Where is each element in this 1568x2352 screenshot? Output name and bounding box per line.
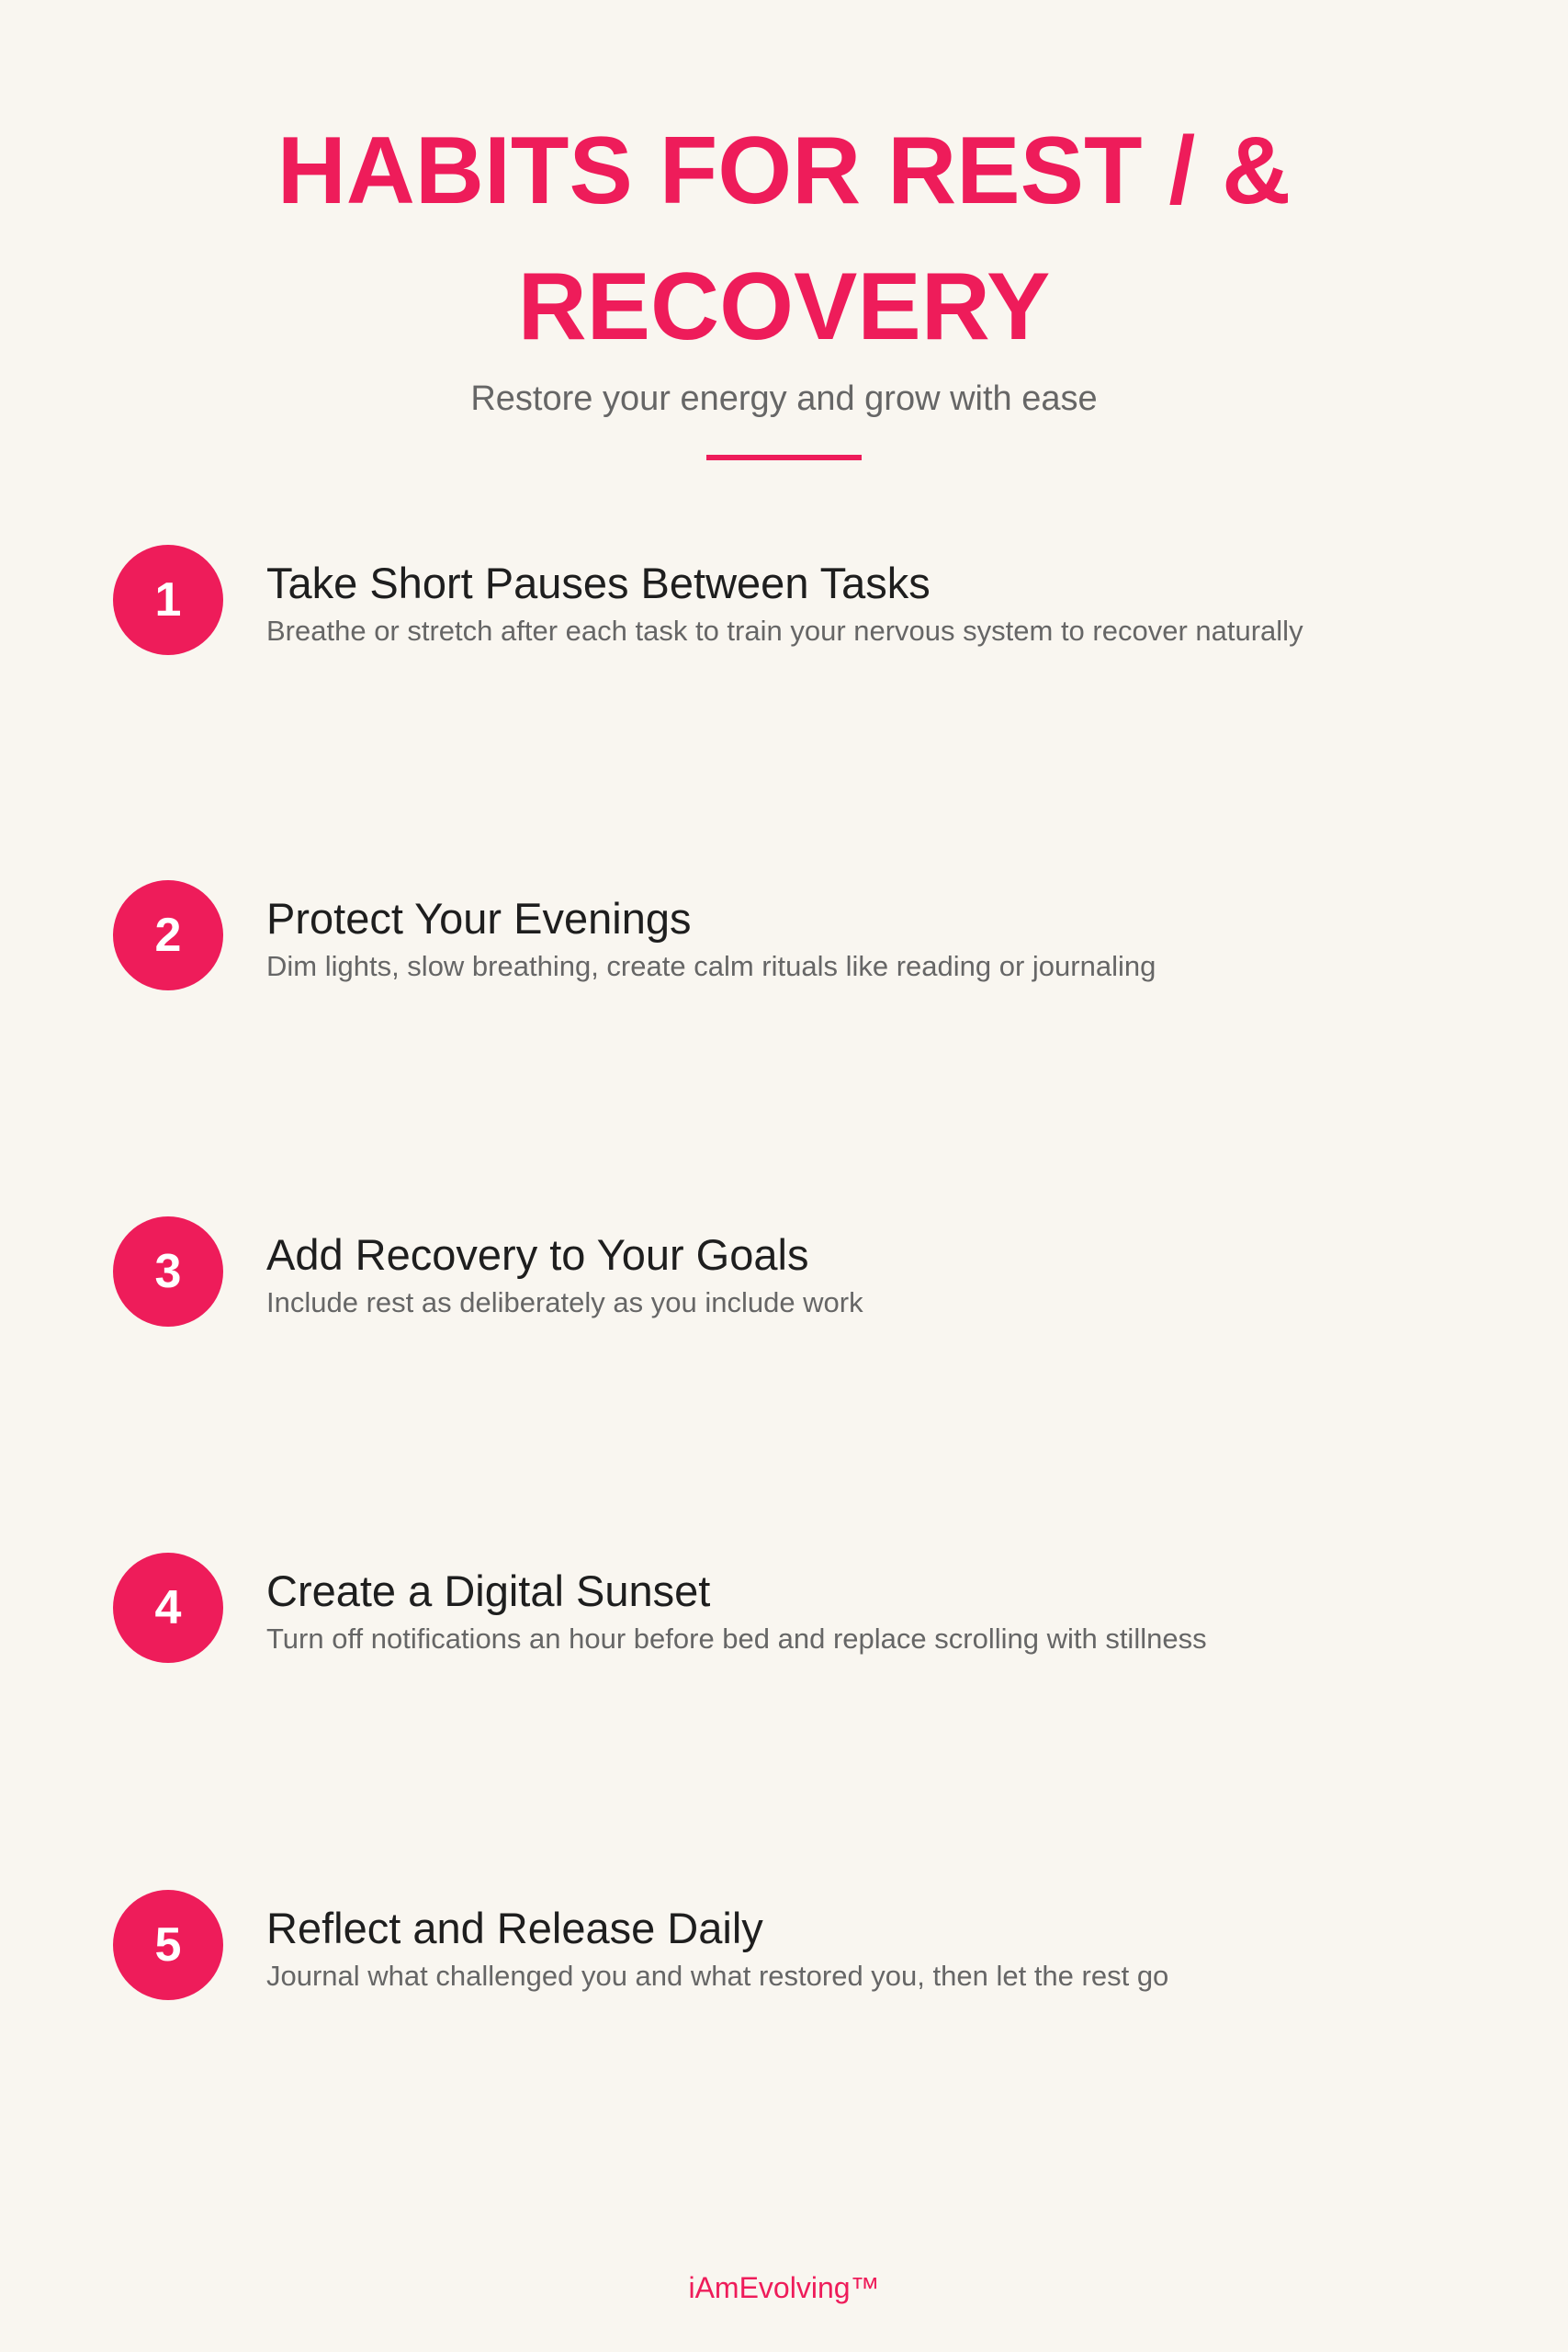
icon: number 5 <box>113 1890 223 2000</box>
icon: number 4: 4 <box>155 1581 181 1634</box>
icon: number 4 <box>113 1553 223 1663</box>
icon: number 5: 5 <box>155 1918 181 1972</box>
item 1: Breathe or stretch after each task to train your nervous system to recover naturally <box>266 615 1303 647</box>
item 4: Turn off notifications an hour before bed and replace scrolling with stillness <box>266 1623 1207 1655</box>
item 2 <box>266 894 1156 982</box>
title: HABITS FOR REST / & <box>277 118 1291 224</box>
icon: number 3: 3 <box>155 1245 181 1298</box>
item 3 <box>266 1230 863 1318</box>
title <box>277 118 1291 360</box>
divider <box>706 455 862 460</box>
icon: number 1: 1 <box>155 573 181 627</box>
item 1: Take Short Pauses Between Tasks <box>266 559 931 607</box>
icon: number 2: 2 <box>155 909 181 962</box>
icon: number 1 <box>113 545 223 655</box>
item 4: Create a Digital Sunset <box>266 1566 710 1615</box>
item 2: Protect Your Evenings <box>266 894 691 943</box>
icon: number 2 <box>113 880 223 990</box>
item 5: Journal what challenged you and what restored you, then let the rest go <box>266 1960 1168 1992</box>
icon: number 3 <box>113 1216 223 1327</box>
subtitle: Restore your energy and grow with ease <box>470 379 1098 418</box>
item 2: Dim lights, slow breathing, create calm rituals like reading or journaling <box>266 950 1156 982</box>
item 4 <box>266 1566 1207 1655</box>
item 5 <box>266 1904 1168 1992</box>
title: RECOVERY <box>518 254 1050 360</box>
item 1 <box>266 559 1303 647</box>
item 5: Reflect and Release Daily <box>266 1904 763 1952</box>
footer: iAmEvolving™ <box>688 2271 880 2304</box>
item 3: Add Recovery to Your Goals <box>266 1230 808 1279</box>
item 3: Include rest as deliberately as you include work <box>266 1286 863 1318</box>
